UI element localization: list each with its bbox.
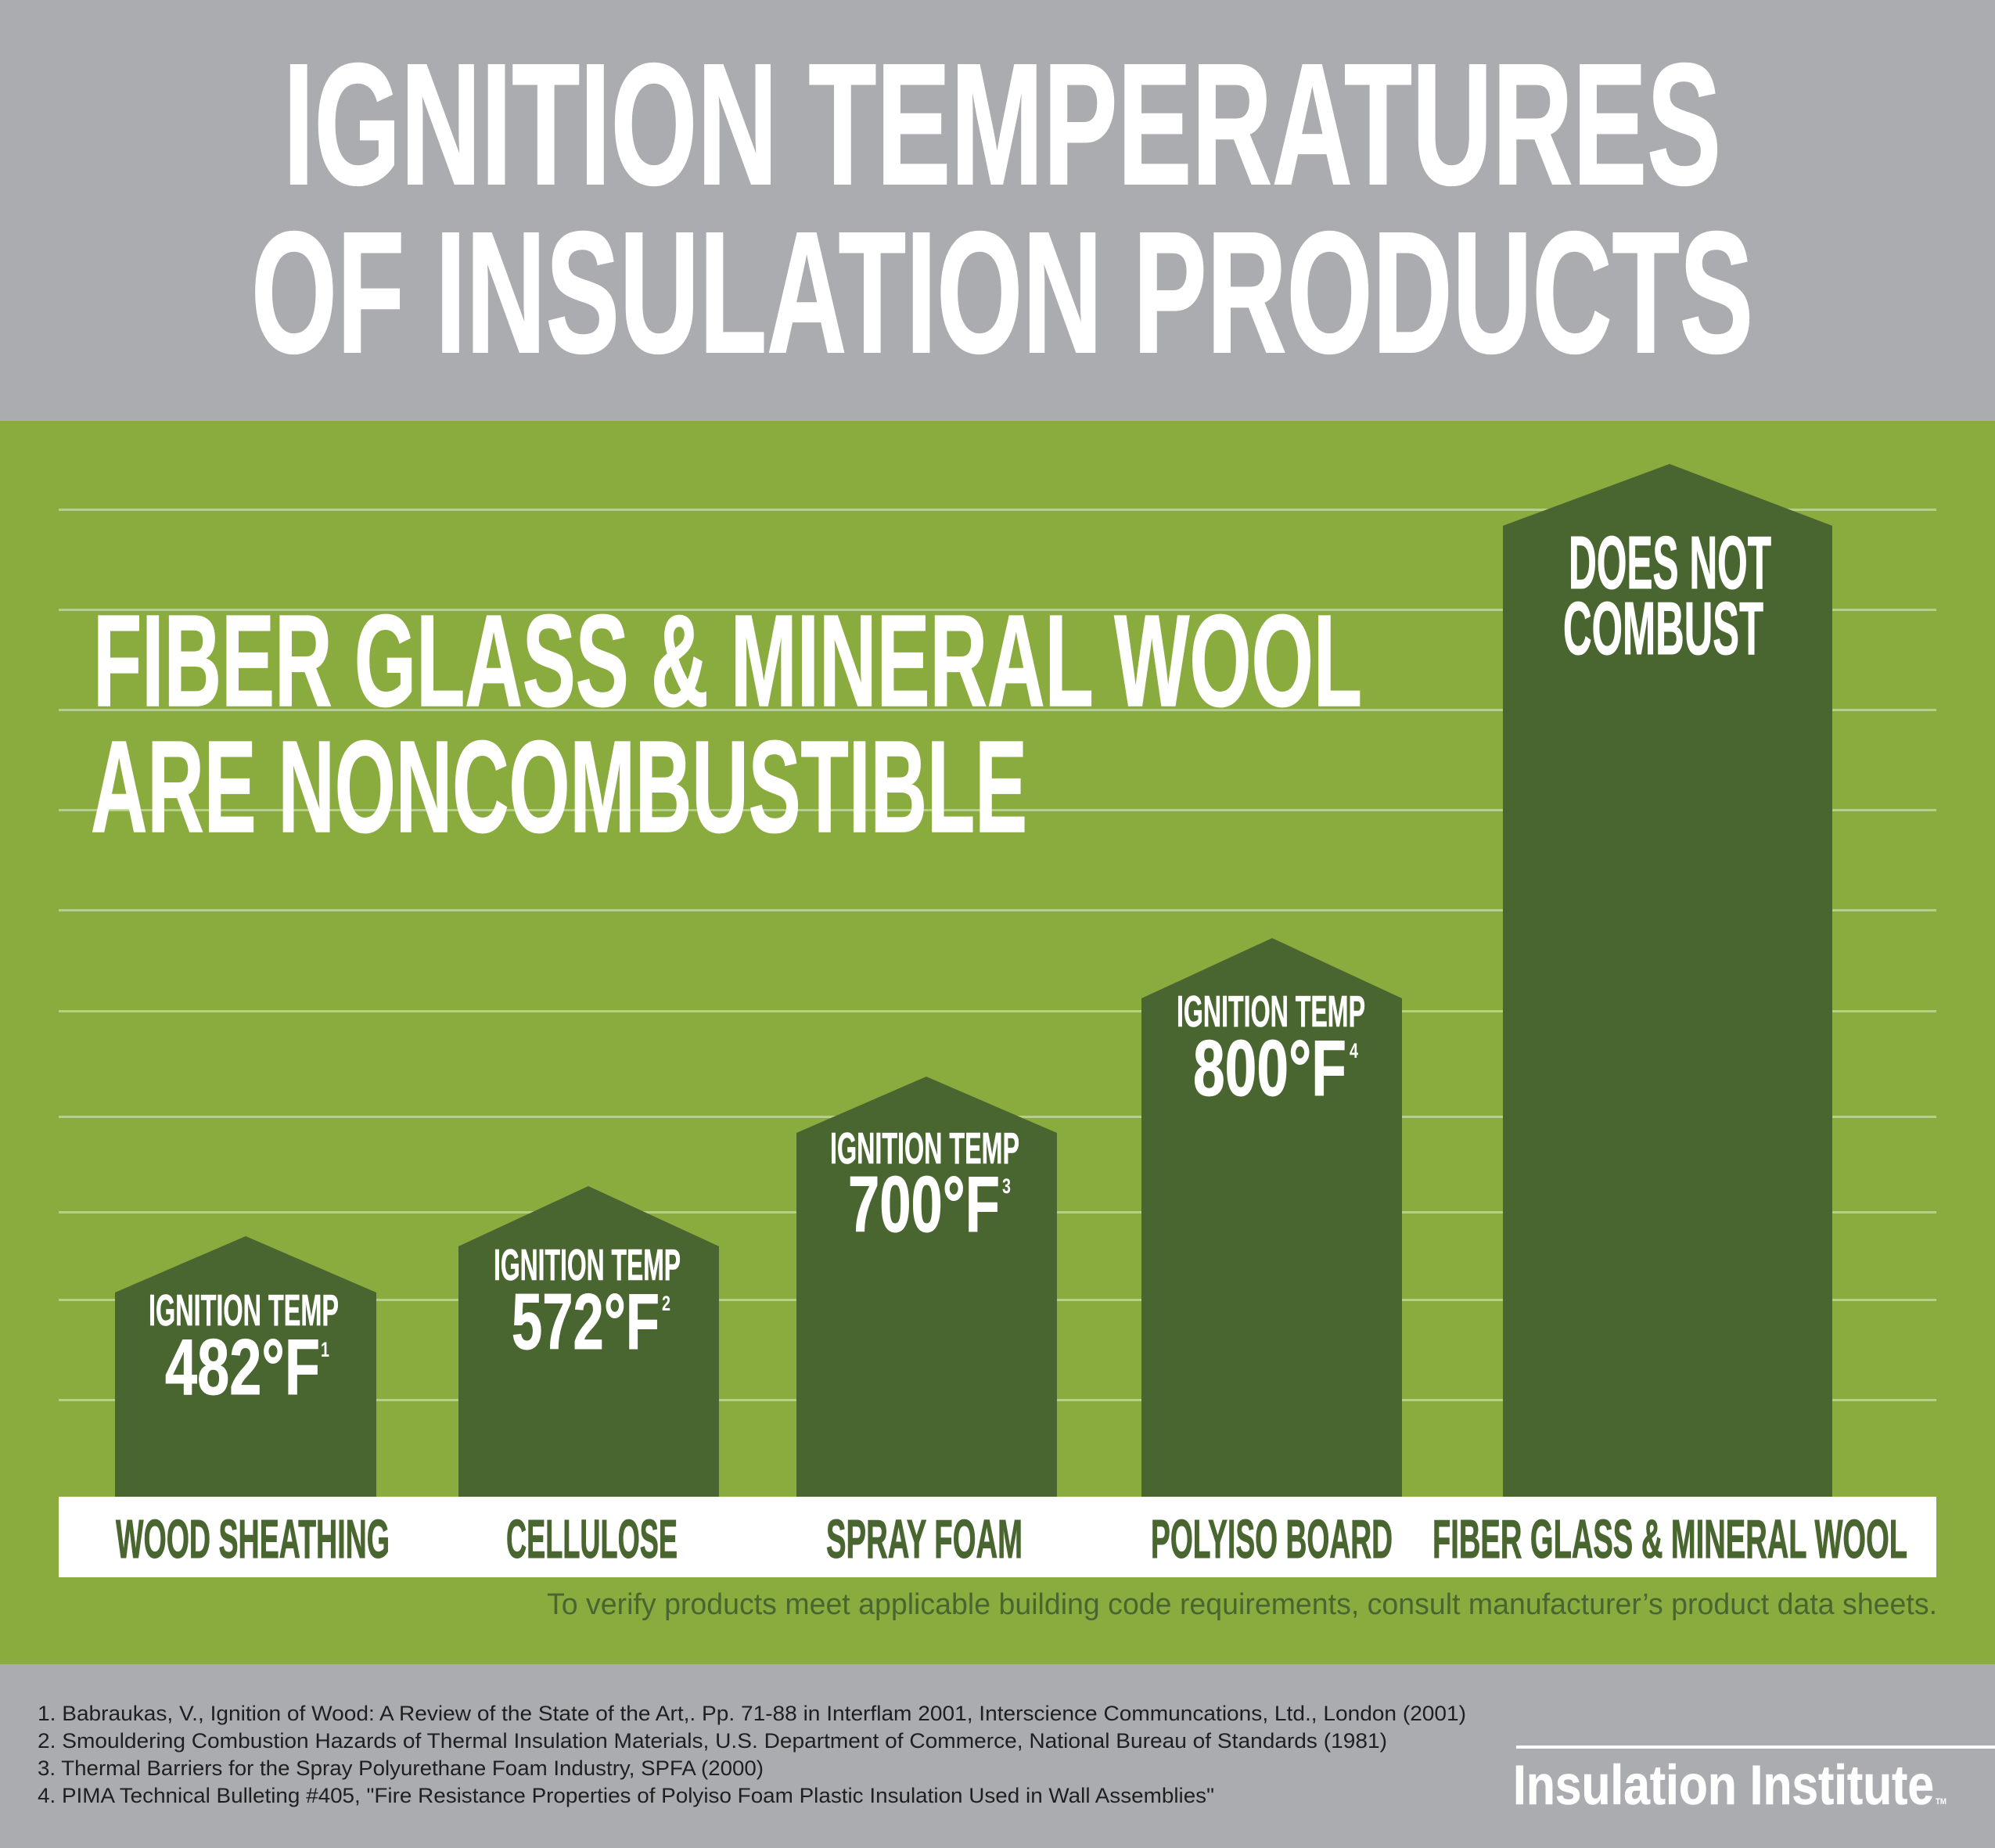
footnote marker 3: 3 <box>1002 1174 1011 1198</box>
value: 482°F: 482°F <box>165 1324 320 1411</box>
footnotes: 2. Smouldering Combustion Hazards of Thermal Insulation Materials, U.S. Department of Commerce, National Bureau of Standards (1981) <box>38 1729 1387 1753</box>
bar: fiber glass and mineral wool <box>1503 464 1832 1497</box>
panel: footer <box>0 1664 1995 1848</box>
panel: chart background <box>0 421 1995 1664</box>
label: ignition temp: IGNITION TEMP <box>149 1285 339 1336</box>
chart grid lines <box>59 509 1936 1401</box>
value: 572°F: 572°F <box>512 1278 660 1366</box>
bar: spray foam <box>796 1077 1057 1497</box>
category: spray foam: SPRAY FOAM <box>826 1508 1023 1569</box>
header panel <box>0 0 1995 421</box>
bar: wood sheathing <box>115 1236 376 1497</box>
label: ignition temp: IGNITION TEMP <box>830 1124 1019 1174</box>
label: does not combust <box>1563 521 1771 671</box>
title <box>251 27 1753 389</box>
footnotes <box>38 1702 1466 1807</box>
footnote marker 4: 4 <box>1350 1039 1358 1062</box>
footnotes: 1. Babraukas, V., Ignition of Wood: A Review of the State of the Art,. Pp. 71-88 in Interflam 2001, Interscience Communcations, Ltd., London (2001) <box>38 1702 1466 1725</box>
category label band <box>59 1497 1936 1577</box>
footnote marker 1: 1 <box>321 1338 329 1361</box>
value: 700°F: 700°F <box>848 1161 1000 1249</box>
bar: polyiso board <box>1141 938 1402 1497</box>
bar: cellulose <box>458 1186 719 1497</box>
category: polyiso board: POLYISO BOARD <box>1151 1508 1393 1569</box>
label: does not combust: DOES NOT <box>1569 521 1771 605</box>
footnotes: 4. PIMA Technical Bulleting #405, "Fire Resistance Properties of Polyiso Foam Plastic Insulation Used in Wall Assemblies" <box>38 1784 1214 1807</box>
category: cellulose: CELLULOSE <box>506 1508 678 1569</box>
verification note: To verify products meet applicable building code requirements, consult manufacturer’s product data sheets. <box>547 1588 1937 1621</box>
logo: Insulation Institute: TM <box>1936 1797 1946 1807</box>
logo: Insulation Institute: Insulation Institute <box>1513 1755 1934 1817</box>
label: ignition temp: IGNITION TEMP <box>1177 987 1365 1037</box>
category: wood sheathing: WOOD SHEATHING <box>116 1508 390 1569</box>
footnotes: 3. Thermal Barriers for the Spray Polyurethane Foam Industry, SPFA (2000) <box>38 1756 764 1780</box>
headline: noncombustible <box>91 588 1362 860</box>
footnote marker 2: 2 <box>662 1292 670 1315</box>
label: does not combust: COMBUST <box>1563 587 1763 671</box>
label: ignition temp: IGNITION TEMP <box>494 1240 681 1290</box>
value: 800°F: 800°F <box>1193 1025 1346 1113</box>
headline: noncombustible: ARE NONCOMBUSTIBLE <box>91 714 1027 860</box>
